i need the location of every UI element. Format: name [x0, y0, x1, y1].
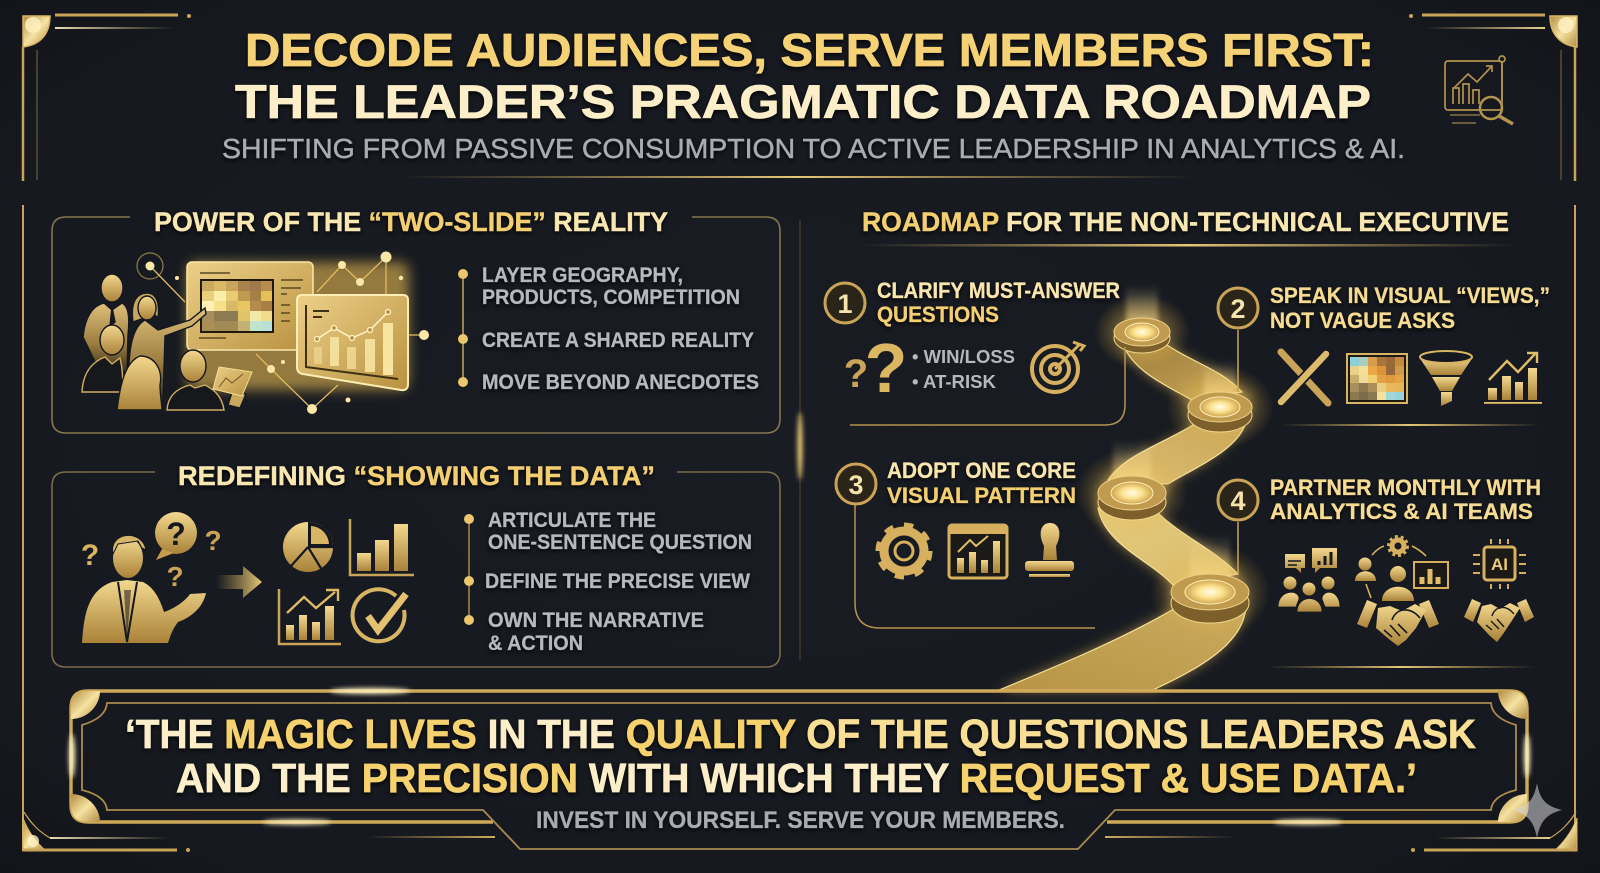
slide two with chart: [297, 295, 408, 390]
number badge: [1218, 480, 1258, 520]
roadmap ribbon: [999, 285, 1274, 690]
step 1: [825, 278, 1125, 425]
icon: questioning leader: ?: [204, 525, 222, 556]
icon: bar chart: [350, 519, 414, 575]
node dots: [146, 252, 429, 414]
icon: questioning leader: ?: [81, 539, 99, 572]
icon: target: [1032, 342, 1084, 392]
icon: questioning leader: ?: [166, 561, 184, 592]
icon: check circle: [353, 589, 406, 641]
bullet rail: [458, 269, 468, 387]
step title: CLARIFY MUST-ANSWER: [877, 278, 1120, 303]
panel: redefining showing the data: [52, 461, 780, 667]
connector: [855, 505, 1095, 628]
icon: collaborating leader and handshake: [1355, 536, 1448, 646]
number badge: [825, 283, 865, 323]
icon: dashboard window: [949, 525, 1007, 578]
bullet list: & ACTION: [488, 632, 583, 655]
step title: SPEAK IN VISUAL “VIEWS,”: [1270, 283, 1550, 308]
arrow: [216, 566, 262, 598]
title: [235, 24, 1374, 128]
milestone disc 4: [1150, 535, 1270, 640]
bullet list: ONE-SENTENCE QUESTION: [488, 531, 752, 554]
icon: AI chip: [1473, 539, 1526, 589]
icon: question marks: ?: [865, 329, 907, 407]
bullet list: LAYER GEOGRAPHY,: [482, 264, 683, 287]
tagline: INVEST IN YOURSELF. SERVE YOUR MEMBERS.: [536, 807, 1065, 834]
tablet: [213, 367, 252, 396]
step title: [877, 278, 1120, 327]
title: THE LEADER’S PRAGMATIC DATA ROADMAP: [235, 75, 1371, 128]
heading: REDEFINING “SHOWING THE DATA”: [178, 461, 655, 491]
banner frame: [71, 691, 1527, 849]
list: • WIN/LOSS: [912, 347, 1015, 367]
icon: team chat: [1278, 548, 1340, 612]
heading: roadmap: ROADMAP FOR THE NON-TECHNICAL EXECUTIVE: [862, 207, 1509, 237]
milestone disc 3: [1076, 440, 1188, 537]
bullet list: [482, 264, 759, 394]
step 3: [836, 458, 1095, 628]
connector: [1237, 330, 1239, 392]
bullet list: MOVE BEYOND ANECDOTES: [482, 371, 759, 394]
step title: VISUAL PATTERN: [887, 483, 1076, 508]
number badge: [836, 464, 876, 504]
icon: pie chart: [283, 520, 334, 575]
bullet rail: [464, 514, 474, 625]
connector: [850, 347, 1125, 425]
list: [912, 347, 1015, 392]
heading: POWER OF THE “TWO-SLIDE” REALITY: [154, 207, 668, 237]
illustration: team viewing two slides: [82, 252, 429, 414]
icon: questioning leader: ?: [166, 516, 186, 552]
step title: [1270, 283, 1550, 333]
step title: [887, 458, 1076, 508]
number badge: [1218, 288, 1258, 328]
icon: question marks: [844, 329, 907, 407]
step title: NOT VAGUE ASKS: [1270, 308, 1455, 333]
step title: PARTNER MONTHLY WITH: [1270, 475, 1541, 500]
frame corner: top left: [23, 14, 191, 47]
step title: ANALYTICS & AI TEAMS: [1270, 499, 1533, 524]
list: • AT-RISK: [912, 372, 996, 392]
bullet list: [485, 509, 752, 655]
number badge: 3: [848, 470, 864, 500]
quote text: [125, 711, 1476, 801]
quote text: AND THE PRECISION WITH WHICH THEY REQUEST & USE DATA.’: [176, 755, 1417, 801]
frame corner: bottom left: [23, 812, 495, 852]
bullet list: OWN THE NARRATIVE: [488, 609, 704, 632]
banner sparkles: [69, 688, 1530, 824]
icon: AI chip: AI: [1491, 555, 1508, 574]
icon: rising bars: [1484, 353, 1542, 404]
step 2: [1218, 283, 1550, 426]
icon: funnel: [1419, 351, 1473, 406]
icon: question marks: ?: [844, 352, 868, 396]
icon: handshake: [1464, 599, 1534, 642]
bullet list: DEFINE THE PRECISE VIEW: [485, 570, 750, 593]
ribbon segments: [999, 345, 1246, 690]
banner corners: [71, 691, 1527, 822]
step title: [1270, 475, 1541, 524]
presenter group back: [83, 303, 129, 372]
slide glow: [187, 262, 409, 390]
milestone disc 1: [1094, 285, 1190, 370]
bullet list: PRODUCTS, COMPETITION: [482, 286, 740, 309]
bullet list: ARTICULATE THE: [488, 509, 656, 532]
number badge: 1: [837, 289, 853, 319]
icon: stamp: [1025, 523, 1074, 577]
panel outline: [52, 217, 780, 433]
connector: [1237, 522, 1239, 575]
icon: trend chart: [279, 589, 341, 644]
team silhouettes: [82, 274, 246, 410]
icon: crossed pens: [1281, 352, 1328, 403]
seated figures: [82, 357, 123, 392]
step title: QUESTIONS: [877, 302, 999, 327]
network lines: [137, 253, 424, 409]
icon: gear: [879, 526, 929, 576]
quote banner: [69, 688, 1530, 849]
panel: two-slide reality: [52, 207, 780, 433]
frame corner: bottom right: [1105, 812, 1577, 852]
number badge: 4: [1230, 486, 1246, 516]
title: DECODE AUDIENCES, SERVE MEMBERS FIRST:: [245, 24, 1374, 76]
panel outline: [52, 472, 780, 667]
slide one with heatmap: [187, 262, 313, 350]
number badge: 2: [1230, 294, 1246, 324]
quote text: ‘THE MAGIC LIVES IN THE QUALITY OF THE QUESTIONS LEADERS ASK: [125, 711, 1476, 757]
milestone disc 2: [1166, 360, 1274, 449]
subtitle: SHIFTING FROM PASSIVE CONSUMPTION TO ACTIVE LEADERSHIP IN ANALYTICS & AI.: [222, 133, 1405, 164]
bullet list: CREATE A SHARED REALITY: [482, 329, 754, 352]
step title: ADOPT ONE CORE: [887, 458, 1076, 483]
icon: heatmap: [1347, 354, 1407, 403]
icon: watermark sparkle: [1512, 783, 1562, 838]
step 4: [1218, 475, 1541, 668]
frame corner: top right: [1409, 14, 1577, 47]
ribbon glow: [999, 345, 1250, 690]
icon: analytics magnifier: [1445, 56, 1513, 124]
icon: questioning leader: [81, 512, 222, 643]
